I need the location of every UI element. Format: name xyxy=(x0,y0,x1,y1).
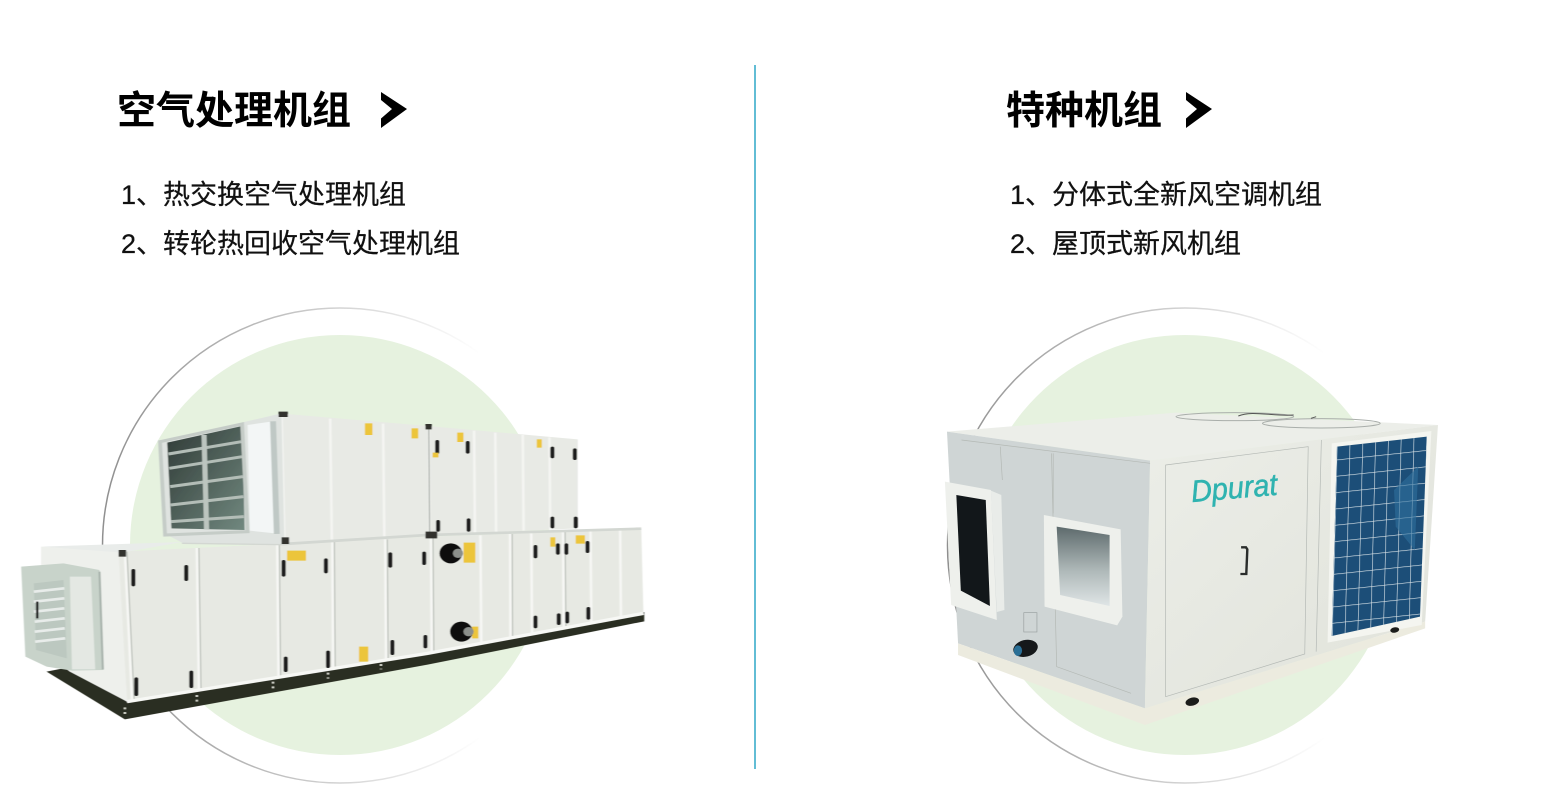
illustration: air handling unit xyxy=(21,412,644,719)
text block: air handling unit types xyxy=(121,180,460,259)
text block: air handling unit types: 1、热交换空气处理机组 xyxy=(121,180,406,210)
panel outlines xyxy=(962,440,1321,697)
upper cabinet seam shadows xyxy=(427,427,431,534)
brand logo: Dpurat xyxy=(1189,467,1280,509)
condenser coil xyxy=(1328,431,1431,643)
decorative circles: left xyxy=(102,308,578,783)
electrical label xyxy=(1024,613,1037,632)
upper cabinet front xyxy=(279,413,578,544)
title: special units: 特种机组 xyxy=(1006,90,1162,133)
roof panel xyxy=(947,413,1438,461)
title: air handling units: 空气处理机组 xyxy=(117,90,351,133)
upper intake frame xyxy=(160,413,284,544)
warning stickers xyxy=(287,423,585,662)
intake damper xyxy=(21,563,104,671)
lower cabinet top xyxy=(41,542,182,553)
text block: special unit types: 2、屋顶式新风机组 xyxy=(1010,229,1241,259)
lower cabinet bottom rail xyxy=(127,613,643,702)
base rail xyxy=(958,622,1425,725)
left side panel xyxy=(947,432,1150,708)
upper cabinet panel seams xyxy=(281,414,550,543)
roof fans xyxy=(1176,413,1380,428)
illustration: rooftop unit xyxy=(945,413,1438,725)
base bolts xyxy=(125,664,381,717)
door handle xyxy=(1240,547,1247,574)
arrow: right heading chevron xyxy=(1186,92,1212,128)
handles xyxy=(133,442,588,694)
base slots xyxy=(1185,626,1400,707)
front panel xyxy=(1145,425,1438,708)
corner fittings xyxy=(119,412,437,557)
text block: air handling unit types: 2、转轮热回收空气处理机组 xyxy=(121,229,460,259)
lower cabinet seam shadows xyxy=(127,532,566,700)
text block: special unit types: 1、分体式全新风空调机组 xyxy=(1010,180,1322,210)
lower cabinet front xyxy=(119,529,643,702)
base frame xyxy=(47,612,644,719)
pipe connector xyxy=(1011,637,1040,659)
lower cabinet panel seams xyxy=(125,530,621,700)
upper cabinet bottom rail xyxy=(182,529,641,544)
left intake frame xyxy=(945,482,1004,620)
lower cabinet side xyxy=(41,547,127,702)
right intake frame with duct xyxy=(1044,515,1122,625)
arrow: left heading chevron xyxy=(381,92,407,128)
decorative circles: right xyxy=(948,308,1422,783)
pipe valves xyxy=(439,543,474,642)
text block: special unit types xyxy=(1010,180,1322,259)
divider line xyxy=(754,65,756,769)
